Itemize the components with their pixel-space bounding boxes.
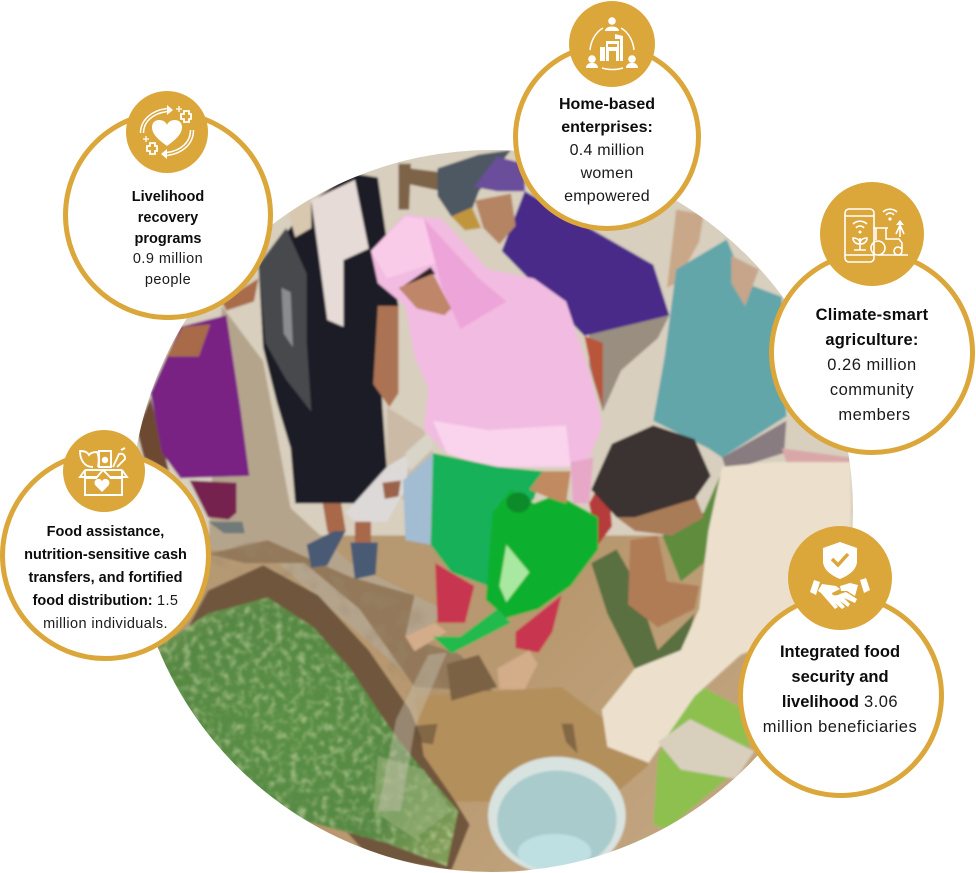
icon: heart with circular arrows and plus signs	[126, 91, 208, 173]
text: livelihood recovery programs: Livelihood	[132, 189, 204, 205]
person in purple dress	[137, 315, 249, 533]
green leaves in pit	[153, 598, 458, 866]
text: livelihood recovery programs: people	[145, 272, 191, 288]
compost pit rim	[180, 565, 470, 871]
panel: food assistance	[0, 430, 211, 661]
text: food assistance: nutrition-sensitive cash	[24, 546, 187, 562]
panel: livelihood recovery programs	[63, 91, 273, 320]
text: food assistance	[24, 524, 187, 632]
photo: woman watering a compost pit, circular crop	[137, 150, 853, 872]
text: food assistance: million individuals.	[43, 616, 168, 632]
text: home-based enterprises: enterprises:	[561, 118, 653, 136]
text: home-based enterprises: empowered	[564, 188, 650, 204]
crouching man	[591, 425, 722, 669]
text: home-based enterprises: women	[581, 164, 633, 182]
text: food assistance: food distribution: 1.5	[33, 592, 178, 608]
text: climate-smart agriculture: 0.26 million	[827, 356, 917, 374]
icon: shield and handshake	[788, 526, 892, 630]
text: integrated food security and livelihood: million beneficiaries	[763, 718, 917, 736]
text: home-based enterprises: Home-based	[559, 96, 655, 112]
ground	[121, 141, 864, 873]
text: climate-smart agriculture: Climate-smart	[816, 306, 928, 324]
text: integrated food security and livelihood: livelihood 3.06	[782, 692, 898, 710]
text: home-based enterprises: 0.4 million	[570, 142, 644, 158]
text: livelihood recovery programs: recovery	[138, 210, 198, 226]
panel: integrated food security and livelihood	[738, 526, 944, 798]
icon: people around a building	[569, 1, 655, 87]
text: livelihood recovery programs	[132, 189, 204, 288]
icon: food box with heart	[63, 430, 145, 512]
metal bucket	[488, 757, 626, 873]
text: climate-smart agriculture: members	[838, 406, 911, 424]
text: integrated food security and livelihood: security and	[791, 668, 889, 686]
text: climate-smart agriculture: community	[830, 380, 914, 398]
water stream	[378, 653, 447, 811]
text: livelihood recovery programs: programs	[135, 231, 201, 247]
icon: smartphone, seedling and tractor	[820, 182, 924, 286]
person in teal shirt	[653, 210, 851, 471]
text: food assistance: Food assistance,	[47, 524, 164, 540]
panel: climate-smart agriculture	[769, 182, 975, 455]
text: food assistance: transfers, and fortified	[29, 570, 182, 586]
person in black dress with white scarf	[222, 173, 399, 579]
woman in pink with watering can	[371, 214, 612, 689]
text: livelihood recovery programs: 0.9 million	[133, 251, 203, 267]
text: climate-smart agriculture: agriculture:	[825, 330, 919, 348]
text: integrated food security and livelihood	[763, 642, 917, 736]
person in cream shawl	[602, 462, 851, 829]
panel: home-based enterprises	[513, 1, 701, 231]
text: integrated food security and livelihood: Integrated food	[780, 642, 900, 660]
bench and seated person at top	[399, 164, 447, 210]
seated child behind	[346, 430, 433, 545]
text: climate-smart agriculture	[816, 306, 928, 424]
woman in purple shawl	[474, 157, 669, 412]
wet soil and dirt	[415, 687, 649, 802]
text: home-based enterprises	[559, 96, 655, 204]
